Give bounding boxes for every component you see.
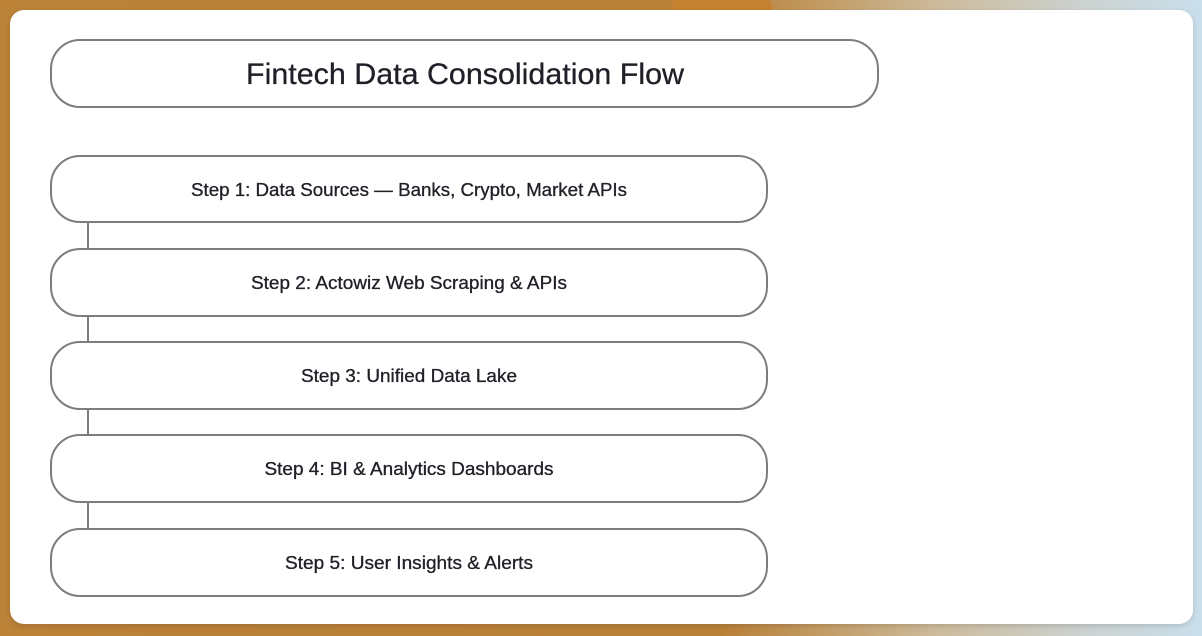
connector: step 1 to step 2 — [87, 222, 89, 249]
background accent: orange glow at top edge — [672, 0, 772, 22]
connector: step 2 to step 3 — [87, 316, 89, 342]
step 1 — [51, 156, 767, 222]
step 5: Step 5: User Insights & Alerts — [285, 553, 533, 573]
title: Fintech Data Consolidation Flow — [246, 58, 684, 91]
connector: step 4 to step 5 — [87, 502, 89, 529]
step 3 — [51, 342, 767, 409]
title — [51, 40, 878, 107]
step 3: Step 3: Unified Data Lake — [301, 366, 517, 386]
step 1: Step 1: Data Sources — Banks, Crypto, Market APIs — [191, 180, 627, 200]
step 2 — [51, 249, 767, 316]
step 4: Step 4: BI & Analytics Dashboards — [264, 459, 554, 479]
step 2: Step 2: Actowiz Web Scraping & APIs — [251, 273, 567, 293]
connector: step 3 to step 4 — [87, 409, 89, 435]
step 5 — [51, 529, 767, 596]
step 4 — [51, 435, 767, 502]
